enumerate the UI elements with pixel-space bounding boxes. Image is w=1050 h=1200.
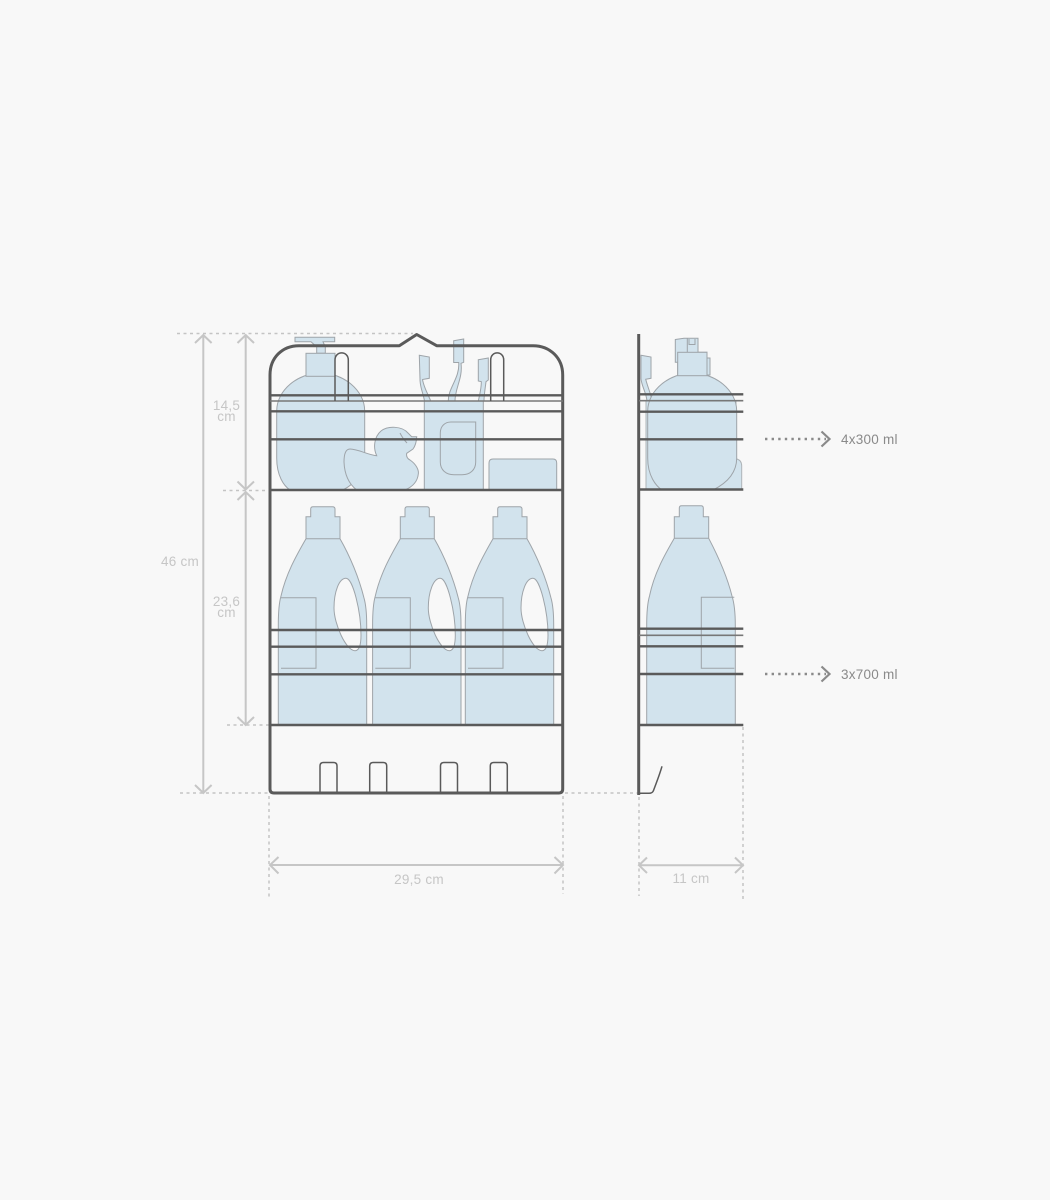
front view: stored items xyxy=(277,337,557,724)
dimension: width 29,5 cm: 29,5 cm xyxy=(394,872,444,887)
shelf rails xyxy=(270,395,563,725)
dimension guide lines xyxy=(177,334,743,900)
dimension: width 29,5 cm xyxy=(270,857,563,887)
side view: shelf profile xyxy=(639,334,743,795)
dimension: lower height 23,6 cm xyxy=(213,492,254,725)
dimension: upper height 14,5 cm xyxy=(213,335,254,490)
front view: shelf frame xyxy=(270,334,563,793)
frame outline xyxy=(270,334,563,793)
dimension: lower height 23,6 cm: cm xyxy=(217,605,236,620)
icon: side view toothbrush xyxy=(641,355,652,401)
capacity callout: 4x300 ml: 4x300 ml xyxy=(841,432,898,447)
icon: rubber duck xyxy=(344,427,418,490)
icon: soap bar xyxy=(489,459,557,490)
icon: toothbrushes in cup xyxy=(419,339,488,490)
capacity callout: 3x700 ml: 3x700 ml xyxy=(841,667,898,682)
icon: pump soap bottle xyxy=(277,337,365,490)
side view: stored items xyxy=(641,338,742,724)
icon: side view cup and soap xyxy=(646,401,742,490)
lower slots xyxy=(320,762,507,793)
icon: side view large bottle xyxy=(647,506,735,724)
icon: side view pump xyxy=(675,338,710,376)
icon: side view soap bottle xyxy=(648,373,737,490)
dimension: upper height 14,5 cm: 14,5 xyxy=(213,398,240,413)
capacity callout: 3x700 ml xyxy=(765,666,898,682)
dimension: depth 11 cm xyxy=(639,858,743,886)
back wall xyxy=(637,334,640,795)
upper hooks xyxy=(335,353,504,401)
side rails xyxy=(639,394,743,725)
dimension: total height 46 cm: 46 cm xyxy=(161,554,199,569)
dimension: total height 46 cm xyxy=(161,335,212,793)
foot hook xyxy=(639,766,662,793)
dimension: upper height 14,5 cm: cm xyxy=(217,409,236,424)
dimension: lower height 23,6 cm: 23,6 xyxy=(213,594,240,609)
capacity callout: 4x300 ml xyxy=(765,432,898,447)
dimension: depth 11 cm: 11 cm xyxy=(672,871,710,886)
icon: large bottles xyxy=(278,507,554,724)
